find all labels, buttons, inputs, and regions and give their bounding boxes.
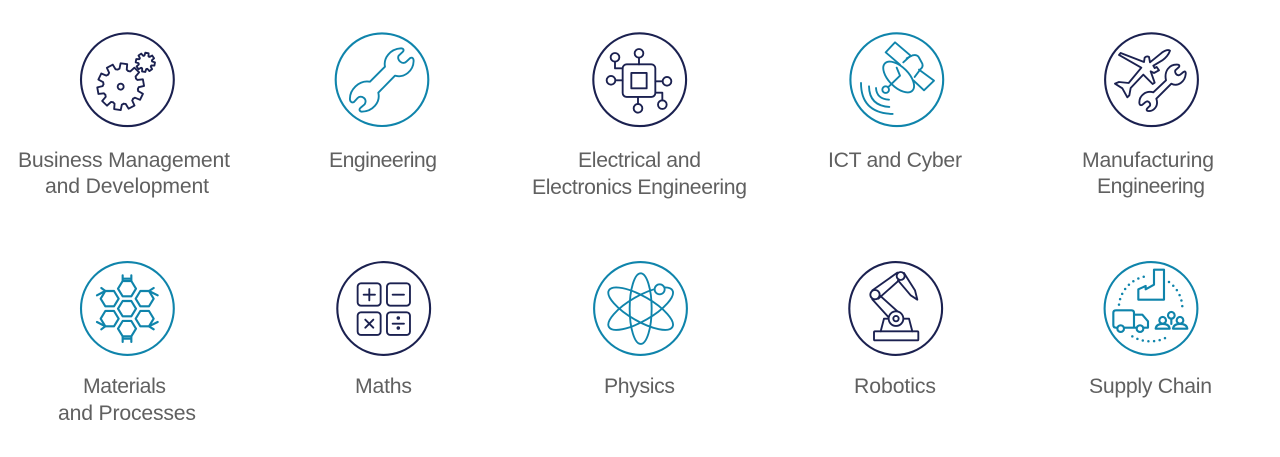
label: Physics: Physics: [604, 375, 675, 398]
icon: wrench: [336, 33, 428, 126]
icon: calculator symbols: [337, 262, 430, 355]
label: Business Management and Development: and Development: [45, 175, 209, 198]
label: Business Management and Development: [18, 149, 230, 198]
label: Materials and Processes: [58, 375, 196, 425]
label: Materials and Processes: and Processes: [58, 402, 196, 425]
label: Manufacturing Engineering: Engineering: [1097, 175, 1205, 198]
label: Materials and Processes: Materials: [83, 375, 166, 398]
label: Supply Chain: Supply Chain: [1089, 375, 1212, 398]
label: Manufacturing Engineering: [1082, 149, 1214, 198]
label: Engineering: Engineering: [329, 149, 437, 172]
label: ICT and Cyber: ICT and Cyber: [828, 149, 962, 172]
icon: satellite: [850, 33, 943, 126]
icon: plane and spanner: [1105, 33, 1198, 126]
label: Electrical and Electronics Engineering: Electrical and: [578, 149, 701, 172]
label: Electrical and Electronics Engineering: [532, 149, 747, 199]
icon: robot arm: [849, 262, 942, 355]
panel: Engineering: [329, 33, 437, 172]
panel: ICT and Cyber: [828, 33, 962, 172]
panel: Maths: [337, 262, 430, 398]
icon: factory, truck and people cycle: [1105, 262, 1197, 355]
panel: Physics: [594, 262, 687, 398]
label: Robotics: Robotics: [854, 375, 936, 398]
panel: Supply Chain: [1089, 262, 1212, 398]
icon: gears: [81, 33, 174, 126]
icon: hexagon lattice: [81, 262, 174, 355]
label: Maths: Maths: [355, 375, 412, 398]
label: Business Management and Development: Business Management: [18, 149, 230, 172]
icon: circuit chip: [593, 33, 686, 126]
icon: atom: [594, 262, 687, 355]
label: Electrical and Electronics Engineering: Electronics Engineering: [532, 176, 747, 199]
label: Manufacturing Engineering: Manufacturing: [1082, 149, 1214, 172]
panel: Manufacturing Engineering: [1082, 33, 1214, 198]
panel: Robotics: [849, 262, 942, 398]
panel: Electrical and Electronics Engineering: [532, 33, 747, 199]
panel: Materials and Processes: [58, 262, 196, 425]
panel: Business Management and Development: [18, 33, 230, 198]
